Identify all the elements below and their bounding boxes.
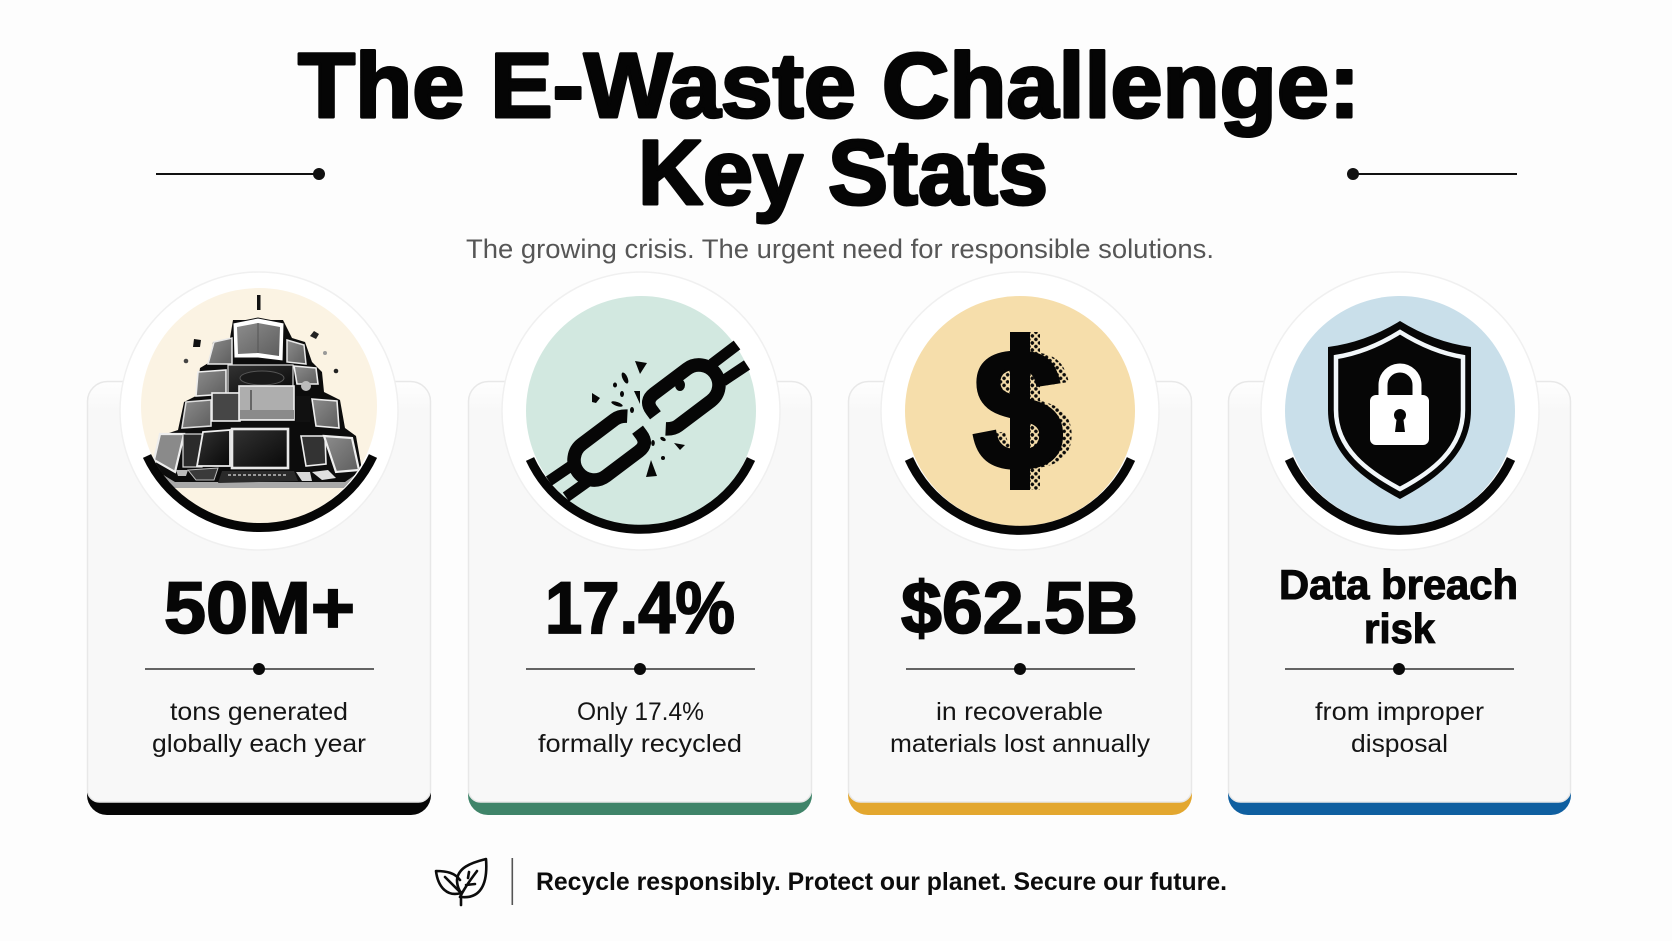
- description: [538, 698, 742, 758]
- subtitle: The growing crisis. The urgent need for responsible solutions.: [466, 234, 1214, 264]
- panel: data breach risk: [1228, 272, 1571, 815]
- divider: [1285, 663, 1514, 675]
- description: tons generated: [170, 698, 348, 726]
- icon: pile of discarded laptops: [120, 272, 398, 550]
- footer tagline: Recycle responsibly. Protect our planet. Secure our future.: [536, 868, 1227, 896]
- title: [298, 35, 1360, 224]
- description: Only 17.4%: [577, 698, 704, 726]
- description: [890, 698, 1151, 758]
- card body with black base: [87, 382, 431, 815]
- description: [1315, 698, 1484, 758]
- footer separator: [512, 858, 513, 905]
- icon: dollar sign: $: [972, 312, 1064, 507]
- description: from improper: [1315, 698, 1484, 726]
- panel: $62.5B lost: [848, 272, 1192, 815]
- icon: dollar sign: $: [982, 312, 1074, 507]
- panel: 17.4% recycled: [468, 272, 812, 815]
- card body with green base: [468, 382, 812, 815]
- stat: data breach risk: [1279, 561, 1518, 652]
- stat: data breach risk: risk: [1364, 605, 1436, 652]
- description: [152, 698, 366, 758]
- card body with blue base: [1228, 382, 1571, 815]
- stat: data breach risk: Data breach: [1279, 561, 1518, 608]
- divider: [906, 663, 1135, 675]
- stat: $62.5B: $62.5B: [901, 568, 1138, 649]
- icon: dollar sign: [881, 272, 1159, 550]
- title: Key Stats: [638, 122, 1048, 224]
- stat: 17.4%: 17.4%: [545, 568, 735, 649]
- icon: shield with padlock: [1261, 272, 1539, 550]
- divider: [526, 663, 755, 675]
- title: The E-Waste Challenge:: [298, 35, 1360, 137]
- right title ornament: [1347, 168, 1517, 180]
- description: disposal: [1351, 730, 1448, 758]
- divider: [145, 663, 374, 675]
- stat: 50M+: 50M+: [164, 568, 355, 649]
- description: formally recycled: [538, 730, 742, 758]
- panel: 50M+ tons generated: [87, 272, 431, 815]
- card body with yellow base: [848, 382, 1192, 815]
- description: in recoverable: [936, 698, 1103, 726]
- left title ornament: [156, 168, 325, 180]
- description: globally each year: [152, 730, 366, 758]
- icon: leaf sprout: [436, 859, 486, 905]
- icon: broken chain: [502, 272, 780, 550]
- description: materials lost annually: [890, 730, 1151, 758]
